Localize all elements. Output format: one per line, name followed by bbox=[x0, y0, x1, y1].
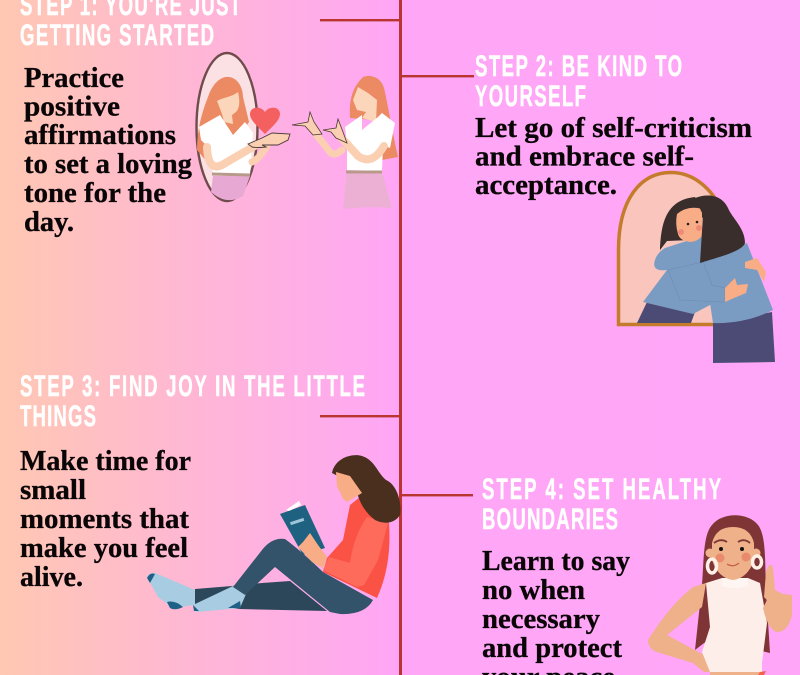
icon: woman hugging reflection in arched mirror bbox=[618, 172, 775, 363]
earrings bbox=[708, 559, 716, 573]
timeline with connectors bbox=[320, 0, 474, 675]
mirror bbox=[196, 53, 258, 201]
heading: step 3 bbox=[20, 370, 365, 433]
heading: step 2: YOURSELF bbox=[475, 80, 586, 113]
midriff and skirt bbox=[710, 672, 762, 675]
icon: woman in mirror with heart bbox=[196, 53, 398, 209]
text: step 3 body: alive. bbox=[20, 562, 83, 593]
face bbox=[712, 527, 754, 580]
text: step 4 body: and protect bbox=[482, 633, 623, 664]
panel: step 4 bbox=[482, 473, 792, 675]
heading: step 4: BOUNDARIES bbox=[482, 503, 618, 536]
skirt bbox=[713, 312, 775, 363]
arm bbox=[648, 583, 730, 672]
reflection hair bbox=[660, 197, 704, 250]
heading: step 1: GETTING STARTED bbox=[20, 19, 214, 52]
text: step 1 body bbox=[24, 63, 192, 238]
hands bbox=[725, 278, 748, 302]
hair bbox=[695, 195, 745, 263]
panel: step 2 bbox=[475, 50, 775, 363]
text: step 3 body: moments that bbox=[20, 504, 190, 535]
reflection hands bbox=[248, 133, 290, 148]
text: step 3 body: small bbox=[20, 475, 86, 506]
text: step 3 body bbox=[20, 446, 191, 593]
hand bbox=[298, 533, 327, 568]
heading: step 1 bbox=[20, 0, 241, 52]
reflection jacket bbox=[643, 236, 712, 314]
hair bbox=[332, 455, 400, 523]
icon: woman raising a finger bbox=[648, 515, 792, 675]
raised hand bbox=[763, 565, 792, 632]
heading: step 2: STEP 2: BE KIND TO bbox=[475, 50, 682, 83]
socks bbox=[147, 573, 195, 608]
heading: step 2 bbox=[475, 50, 682, 113]
hair bbox=[695, 515, 770, 653]
panel: step 3 bbox=[20, 370, 400, 614]
woman bbox=[350, 76, 398, 160]
jacket bbox=[680, 243, 773, 323]
text: step 2 body: and embrace self- bbox=[475, 142, 694, 172]
text: step 1 body: Practice bbox=[24, 63, 124, 94]
text: step 4 body bbox=[482, 546, 630, 675]
text: step 3 body: make you feel bbox=[20, 533, 188, 564]
text: step 1 body: affirmations bbox=[24, 120, 176, 151]
heart bbox=[250, 108, 280, 134]
top bbox=[702, 578, 767, 672]
text: step 2 body: acceptance. bbox=[475, 170, 617, 201]
pointing arms and hands bbox=[315, 133, 342, 154]
text: step 4 body: necessary bbox=[482, 604, 600, 635]
text: step 4 body: Learn to say bbox=[482, 546, 630, 577]
panel: step 1 bbox=[20, 0, 398, 238]
reflection pants bbox=[637, 302, 695, 323]
heading: step 4: STEP 4: SET HEALTHY bbox=[482, 473, 721, 506]
reflection arms bbox=[207, 144, 258, 167]
front leg bbox=[233, 539, 373, 614]
text: step 4 body: no when bbox=[482, 575, 585, 606]
text: step 1 body: tone for the bbox=[24, 178, 166, 209]
text: step 1 body: to set a loving bbox=[24, 149, 192, 180]
text: step 1 body: positive bbox=[24, 92, 120, 122]
heading: step 3: THINGS bbox=[20, 400, 96, 433]
text: step 2 body: Let go of self-criticism bbox=[475, 113, 752, 144]
heading: step 3: STEP 3: FIND JOY IN THE LITTLE bbox=[20, 370, 365, 403]
heading: step 4 bbox=[482, 473, 721, 536]
back leg bbox=[195, 581, 327, 611]
text: step 1 body: day. bbox=[24, 207, 74, 238]
reflection face bbox=[676, 208, 702, 242]
text: step 2 body bbox=[475, 113, 752, 201]
face bbox=[336, 472, 362, 502]
book bbox=[280, 505, 325, 555]
icon: woman reading a book bbox=[147, 455, 400, 614]
arched mirror bbox=[618, 172, 722, 324]
sweater bbox=[323, 497, 390, 598]
reflection bbox=[197, 77, 249, 168]
text: step 3 body: Make time for bbox=[20, 446, 191, 477]
